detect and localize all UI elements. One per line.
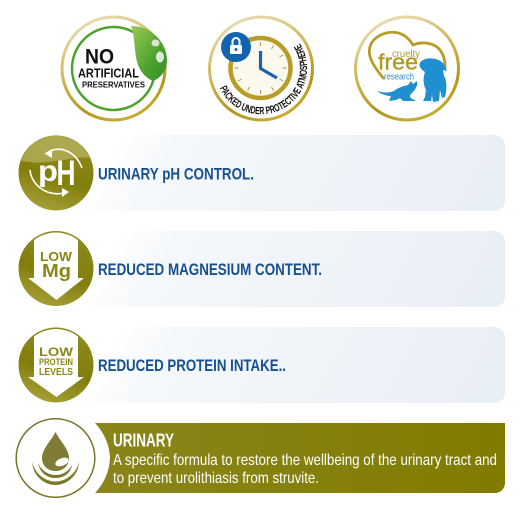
- icon: kitten: [377, 81, 417, 101]
- banner: urinary: [95, 423, 505, 493]
- badge text: ARTIFICIAL: [78, 66, 139, 80]
- heart text: free: [378, 50, 418, 74]
- badge: cruelty free research: [356, 17, 458, 120]
- badge: no artificial preservatives: [62, 17, 167, 120]
- icon: low protein arrow: [18, 326, 95, 402]
- heart text: research: [384, 72, 414, 82]
- badge text: [78, 46, 145, 90]
- icon: oil drop: [16, 419, 95, 497]
- panel: reduced protein: [85, 327, 505, 403]
- icon: pH: H: [56, 154, 76, 193]
- badge: packed under protective atmosphere: [208, 16, 314, 122]
- icon: puppy: [419, 58, 447, 102]
- icon: low Mg arrow: LOW: [40, 250, 72, 264]
- panel label: REDUCED PROTEIN INTAKE..: [98, 356, 286, 375]
- icon: low protein arrow: LOW: [39, 345, 74, 359]
- banner heading: URINARY: [113, 430, 174, 450]
- badge text: PRESERVATIVES: [82, 80, 145, 90]
- icon: pH: [18, 130, 95, 210]
- heart text: cruelty: [392, 49, 420, 60]
- icon: leaf with water drops: [131, 26, 167, 81]
- curved text: PACKED UNDER PROTECTIVE ATMOSPHERE: [220, 44, 308, 114]
- icon: padlock: [221, 32, 251, 62]
- icon: clock: [230, 38, 290, 98]
- badge text: NO: [85, 46, 114, 68]
- icon: low Mg arrow: [18, 230, 95, 306]
- icon: low protein arrow: LEVELS: [39, 366, 73, 378]
- icon: low protein arrow: PROTEIN: [39, 357, 73, 368]
- panel: reduced magnesium: [85, 231, 505, 307]
- icon: low Mg arrow: Mg: [42, 261, 71, 281]
- panel: urinary pH control: [85, 135, 505, 211]
- panel label: URINARY pH CONTROL.: [98, 164, 254, 184]
- icon: pH: p: [38, 155, 58, 188]
- heart text: [378, 49, 420, 82]
- banner description: [113, 452, 497, 487]
- panel label: REDUCED MAGNESIUM CONTENT.: [98, 260, 322, 279]
- icon: heart outline: [369, 32, 445, 79]
- banner description: to prevent urolithiasis from struvite.: [113, 470, 319, 487]
